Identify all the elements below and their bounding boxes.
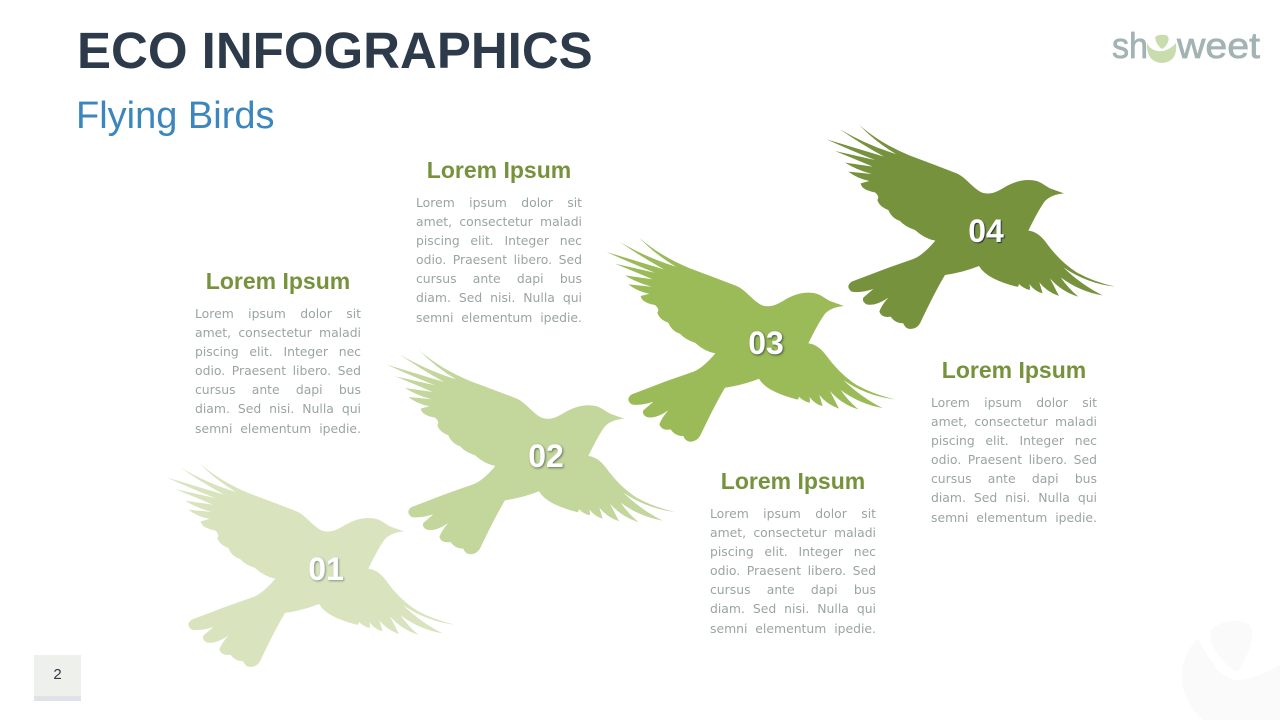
bird 04 (827, 125, 1115, 329)
text block 03: Lorem ipsum dolor sit (710, 506, 876, 520)
bird 01 (167, 463, 455, 667)
text: Lorem Ipsum (206, 268, 350, 294)
text block 04: amet, consectetur maladi (931, 414, 1097, 429)
text: Lorem Ipsum (721, 468, 865, 494)
text block 03: diam. Sed nisi. Nulla qui (710, 601, 876, 616)
bird 01: 01 (308, 551, 344, 587)
logo: showeet: sh (1112, 25, 1148, 66)
text block 04: semni elementum ipedie. (931, 510, 1097, 525)
text block 02: piscing elit. Integer nec (416, 233, 582, 248)
text: Lorem Ipsum (427, 156, 571, 182)
bird 02 (387, 350, 675, 554)
text block 03: amet, consectetur maladi (710, 525, 876, 540)
text block 02: diam. Sed nisi. Nulla qui (416, 290, 582, 305)
text block 02: amet, consectetur maladi (416, 214, 582, 229)
bird 03: 03 (748, 325, 784, 361)
title: ECO INFOGRAPHICS (77, 22, 593, 79)
text block 01: semni elementum ipedie. (195, 421, 361, 436)
text block 01: piscing elit. Integer nec (195, 344, 361, 359)
text block 03: odio. Praesent libero. Sed (710, 563, 876, 578)
text block 01: cursus ante dapi bus (195, 382, 361, 397)
text block 03: piscing elit. Integer nec (710, 544, 876, 559)
text block 04: Lorem ipsum dolor sit (931, 394, 1097, 410)
bird 04: 04 (968, 213, 1004, 249)
text block 01 (195, 268, 361, 436)
bird 02: 02 (528, 438, 564, 474)
text: Lorem Ipsum (942, 356, 1086, 382)
watermark: corner leaf mark (1182, 621, 1280, 720)
text block 01: diam. Sed nisi. Nulla qui (195, 401, 361, 416)
text block 02: semni elementum ipedie. (416, 310, 582, 325)
logo: showeet: weet (1176, 25, 1260, 66)
page number (34, 655, 81, 701)
bird 03 (607, 238, 895, 442)
text block 02 (416, 156, 582, 325)
text block 04: diam. Sed nisi. Nulla qui (931, 490, 1097, 505)
text block 03: cursus ante dapi bus (710, 582, 876, 597)
text block 04: piscing elit. Integer nec (931, 433, 1097, 448)
text block 04: cursus ante dapi bus (931, 471, 1097, 486)
text block 02: odio. Praesent libero. Sed (416, 252, 582, 267)
text block 01: amet, consectetur maladi (195, 325, 361, 340)
text block 03 (710, 468, 876, 636)
text block 01: odio. Praesent libero. Sed (195, 363, 361, 378)
page number: 2 (53, 666, 62, 683)
subtitle: Flying Birds (76, 95, 274, 137)
text block 04 (931, 356, 1097, 525)
logo: showeet (1112, 25, 1260, 66)
text block 01: Lorem ipsum dolor sit (195, 306, 361, 320)
text block 02: Lorem ipsum dolor sit (416, 194, 582, 210)
text block 04: odio. Praesent libero. Sed (931, 452, 1097, 467)
text block 02: cursus ante dapi bus (416, 271, 582, 286)
text block 03: semni elementum ipedie. (710, 621, 876, 636)
